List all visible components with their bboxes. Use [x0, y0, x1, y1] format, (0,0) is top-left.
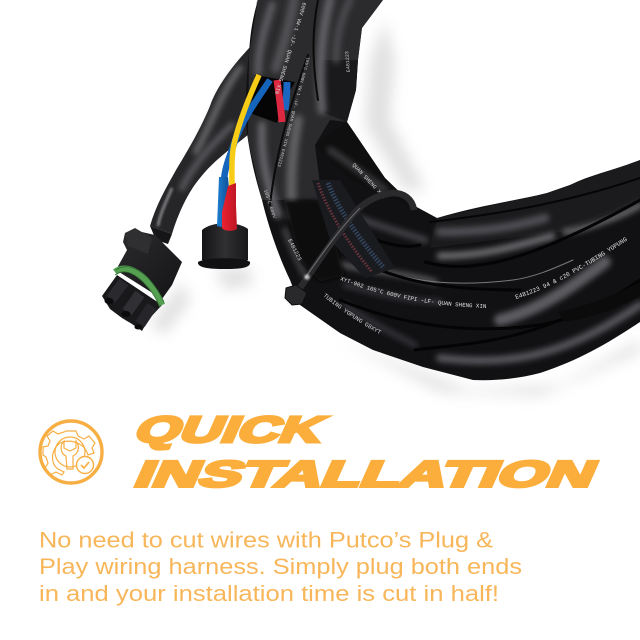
- body line 2: Play wiring harness. Simply plug both ends: [39, 554, 522, 579]
- photo: wiring harness: [102, 0, 640, 399]
- body line 3: in and your installation time is cut in half!: [39, 581, 499, 606]
- soft shadows: [150, 20, 640, 396]
- inner blue wire: [285, 82, 287, 110]
- cable end: [150, 226, 172, 244]
- title line: QUICK: QUICK: [128, 410, 333, 451]
- grommet with terminals: [198, 177, 250, 269]
- icon: gear with wrench and check: [40, 421, 102, 483]
- cable tie: [285, 193, 414, 305]
- fold lines: [270, 0, 640, 350]
- sleeve text: E481223 94 & c20 PVC-TUBING YOPUNG: [515, 237, 627, 299]
- check badge: [76, 456, 94, 474]
- cable tie head: [285, 285, 307, 305]
- inner red wire: [277, 80, 282, 122]
- sleeve text: 105°C 600V: [262, 189, 277, 219]
- wrench ring: [55, 437, 85, 467]
- cable bands right: [430, 160, 640, 248]
- sleeve opening: [250, 75, 295, 123]
- grommet: [202, 223, 248, 264]
- title line: INSTALLATION: INSTALLATION: [128, 454, 604, 495]
- title: [128, 410, 604, 495]
- sleeve text: QUAN SHENG XIN: [351, 162, 387, 200]
- sleeve text: XYT-002 105°C 600V FIPI -LF- QUAN SHENG XIN: [340, 276, 486, 308]
- red terminal: [222, 183, 237, 231]
- black lower sleeve: [347, 122, 398, 190]
- outer circle: [40, 421, 102, 483]
- sleeve text: 105°C 600V VW-1 -LF- QUAN SHENG XIN E481223: [276, 56, 310, 168]
- sleeves and highlights, clipped to bundle: [248, 0, 640, 360]
- blue wire: [224, 80, 270, 182]
- side cable to connector: [150, 46, 254, 234]
- ring terminal: [258, 0, 274, 12]
- gear: [43, 431, 95, 475]
- main black bundle silhouette: [246, 0, 640, 380]
- blue terminal: [217, 177, 229, 228]
- sleeve text: [262, 1, 627, 334]
- yellow wire: [232, 75, 259, 186]
- sleeve text: TUBING YOPUNG G8XYT: [324, 293, 382, 334]
- green seal: [115, 269, 162, 305]
- connector: [102, 226, 182, 331]
- wrench: [61, 441, 78, 469]
- braided mesh: [312, 180, 640, 304]
- sleeve text: E481223: [344, 51, 352, 72]
- sleeve text: E481223: [286, 238, 303, 262]
- black hollow under sleeves: [283, 200, 345, 282]
- top charcoal sleeves: [248, 0, 383, 200]
- body text: [39, 528, 522, 606]
- wires emerging from cut sleeve: [224, 75, 295, 186]
- sleeve text: 600V VW-1 -LF- QUAN SHENG XIN: [273, 1, 308, 95]
- mid upper sleeve: [324, 60, 358, 122]
- body line 1: No need to cut wires with Putco’s Plug &: [39, 528, 493, 552]
- connector body: [116, 230, 182, 299]
- connector pins: [102, 275, 162, 331]
